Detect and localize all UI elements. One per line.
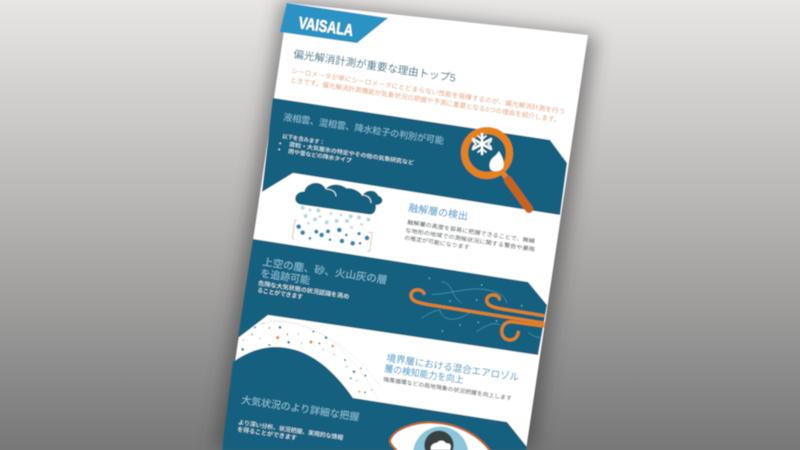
panel 3 heading: 上空の塵、砂、火山灰の層 [262,255,388,287]
icon: snowflake [473,134,491,154]
panel 3 heading: を追跡可能 [260,267,311,287]
panel 5 body: より深い分析、状況把握、実用的な情報 [238,418,344,442]
logo banner [280,3,388,43]
panel 1 heading: 液相雲、混相雲、降水粒子の判別が可能 [283,111,445,146]
snow dots [301,206,370,229]
intro text: シーロメータが単にシーロメータにとどまらない性能を発揮するのが、偏光解消計測を行う [291,66,566,116]
panel 1 body: 雲粒・大気層氷の特定やその他の気象研究など [289,140,415,167]
panel 4 heading: 層の検知能力を向上 [384,363,465,386]
dashed arcs [262,321,380,400]
cloud [431,441,451,450]
title: 偏光解消計測が重要な理由トップ5 [293,48,457,85]
panel 3 body: ることができます [257,286,304,301]
panel: band 1 background [262,98,567,215]
panel 4 body: 強風循環などの局地現象の状況把握を向上します [383,375,513,402]
coloured dots [241,326,366,393]
dots [428,277,522,332]
infographic sheet [222,3,588,450]
panel 2 body [404,218,536,253]
panel 3 body: 危険な大気状態の状況認識を高め [258,279,350,301]
icon: water drop [490,151,504,171]
page shadow [214,0,596,450]
icon: wind [411,277,543,340]
faint air currents [422,282,540,337]
intro text: ときです。偏光解消計測機能が気象状況の把握や予測に重要となる5つの理由を紹介します。 [290,75,561,124]
panel 2 body: な地形の地域での測候状況に関する警告や豪雨 [405,226,536,253]
icon: magnifier [464,130,529,209]
panel 1 body: • [279,141,282,147]
panel 5 body: を得ることができます [237,425,297,442]
rain drops [296,224,369,246]
panel: band 3 background with dome [222,347,527,450]
panel 5 heading: 大気状況のより詳細な把握 [241,393,360,424]
brackets [292,220,372,251]
pupil [424,431,454,450]
panel 1 body: 雨や雪などの降水タイプ [288,147,353,165]
panel 4 heading: 境界層における混合エアロゾル [386,352,520,384]
iris [413,427,468,450]
panel: band 2 background [238,239,547,355]
panel 1 body: 以下を含みます： [282,133,325,146]
page [222,3,588,450]
panel 4 graphic: aerosol dots [241,321,380,400]
icon: cloud with rain [292,183,382,251]
wind streaks [411,290,543,340]
panel 2 body: 融解層の高度を容易に把握できることで、無線 [407,218,536,245]
panel 1 body: • [278,147,281,153]
panel 2 heading: 融解層の検出 [408,201,469,223]
panel 1 body [278,133,415,167]
logo text: VAISALA [297,14,355,40]
icon: eye [390,423,493,450]
panel 2 body: の推定が可能になります [404,234,471,251]
